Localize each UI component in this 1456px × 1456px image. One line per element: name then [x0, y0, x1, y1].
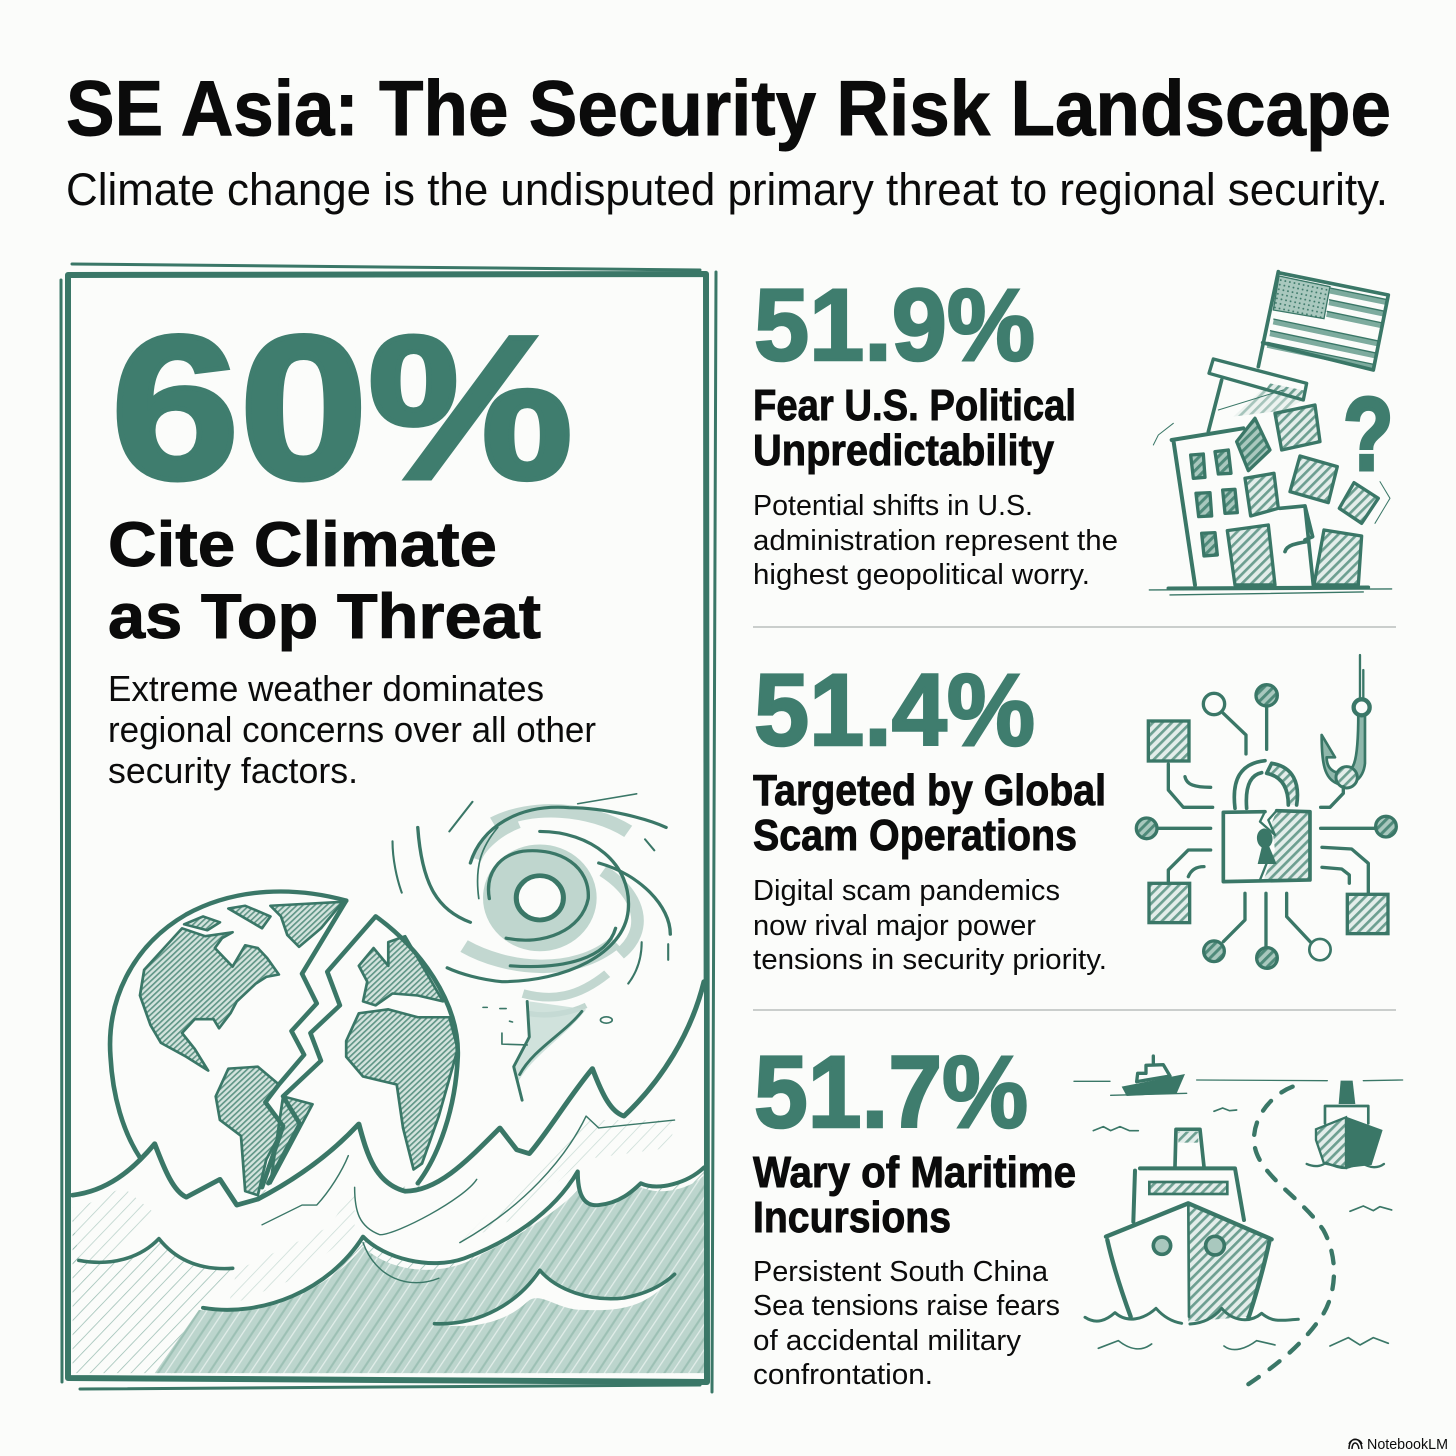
watermark: NotebookLM — [1349, 1436, 1448, 1453]
flag — [1258, 272, 1388, 370]
big stat: 60%: 60% — [111, 294, 573, 522]
illustration: cracked globe, hurricane and waves — [73, 794, 704, 1373]
stat 51.9%: 51.9% — [754, 268, 1035, 382]
heading: Targeted by Global — [753, 766, 1106, 815]
description: highest geopolitical worry. — [753, 559, 1090, 591]
heading — [753, 766, 1106, 860]
icon: collapsing building with U.S. flag — [1149, 272, 1393, 595]
panel body text: security factors. — [108, 750, 358, 791]
building — [1149, 359, 1392, 595]
small waves — [1093, 1108, 1392, 1350]
panel: climate — [61, 264, 716, 1392]
globe — [110, 892, 458, 1205]
continents — [140, 902, 458, 1195]
icon: question mark: ? — [1343, 375, 1393, 491]
heading: Wary of Maritime — [753, 1148, 1076, 1197]
panel heading: Cite Climate — [108, 510, 497, 580]
stat block: U.S. unpredictability — [753, 268, 1393, 595]
description: Potential shifts in U.S. — [753, 490, 1033, 522]
hurricane — [393, 794, 670, 1015]
heading — [753, 381, 1076, 475]
panel body text: regional concerns over all other — [108, 709, 596, 750]
tornado — [483, 1001, 612, 1100]
description: now rival major power — [753, 910, 1036, 942]
globe white fill — [110, 892, 346, 1205]
wave lines — [73, 982, 704, 1324]
title: SE Asia: The Security Risk Landscape — [66, 64, 1391, 152]
sparse sea hatching — [73, 1088, 704, 1373]
white wave crests — [73, 982, 704, 1310]
main ship — [1085, 1129, 1298, 1324]
description: administration represent the — [753, 525, 1118, 557]
ground line — [1168, 582, 1368, 594]
description — [753, 875, 1107, 976]
panel body text: Extreme weather dominates — [108, 668, 544, 709]
dashed route — [1242, 1087, 1334, 1389]
panel heading: as Top Threat — [108, 582, 541, 652]
distant ship — [1122, 1056, 1185, 1096]
heading: Unpredictability — [753, 426, 1054, 475]
stat block: scam operations — [753, 653, 1396, 976]
horizon — [1074, 1080, 1403, 1095]
description: Sea tensions raise fears — [753, 1290, 1060, 1322]
watermark icon — [1349, 1439, 1362, 1449]
circuit nodes and traces — [1136, 685, 1396, 968]
panel frame — [61, 264, 716, 1392]
description — [753, 490, 1118, 591]
description: tensions in security priority. — [753, 944, 1107, 976]
heading: Incursions — [753, 1193, 951, 1242]
heading: Scam Operations — [753, 811, 1077, 860]
description: confrontation. — [753, 1359, 933, 1391]
sea shading — [155, 1175, 704, 1373]
dividers — [753, 627, 1396, 1010]
stat 51.4%: 51.4% — [754, 653, 1035, 767]
stat block: maritime incursions — [753, 1035, 1403, 1391]
padlock — [1223, 761, 1310, 882]
description: of accidental military — [753, 1325, 1022, 1357]
stat 51.7%: 51.7% — [754, 1035, 1028, 1149]
watermark text: NotebookLM — [1367, 1436, 1448, 1453]
heading — [753, 1148, 1076, 1242]
heading: Fear U.S. Political — [753, 381, 1076, 430]
panel body text — [108, 668, 596, 791]
description: Digital scam pandemics — [753, 875, 1060, 907]
windows and falling blocks — [1191, 418, 1270, 556]
globe outline and crack — [110, 892, 458, 1187]
icon: broken padlock circuit with fish hook — [1136, 655, 1396, 968]
description — [753, 1256, 1060, 1391]
subtitle: Climate change is the undisputed primary threat to regional security. — [66, 164, 1388, 215]
right ship — [1307, 1081, 1384, 1168]
icon: ships at sea with dashed route — [1074, 1056, 1403, 1389]
fish hook — [1322, 655, 1370, 788]
panel heading — [108, 510, 541, 652]
description: Persistent South China — [753, 1256, 1049, 1288]
